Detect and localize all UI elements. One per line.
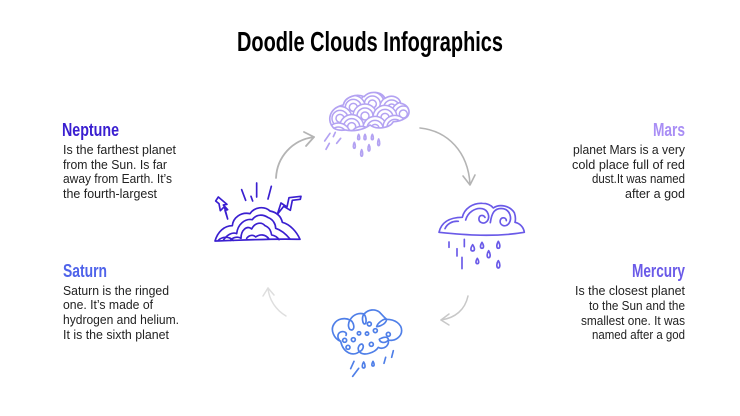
text block: Neptune: Is the farthest planet — [63, 142, 176, 157]
text block: Neptune — [62, 119, 176, 201]
text block: Neptune: from the Sun. Is far — [63, 157, 168, 172]
text block: Saturn: one. It’s made of — [63, 297, 153, 312]
icon: swirl rain cloud — [439, 203, 524, 269]
text block: Mercury: to the Sun and the — [589, 298, 685, 313]
text block: Saturn: Saturn is the ringed — [63, 283, 169, 298]
arrow: top cloud to right cloud — [420, 128, 475, 185]
text block: Mars: after a god — [625, 186, 685, 201]
text block: Saturn: hydrogen and helium. — [63, 312, 179, 327]
text block: Mercury: named after a god — [592, 327, 685, 342]
text block: Mercury: Mercury — [632, 260, 686, 281]
text block: Mercury: Is the closest planet — [575, 283, 685, 298]
text block: Neptune: the fourth-largest — [63, 186, 157, 201]
text block: Mars: dust.It was named — [592, 171, 685, 186]
title: Doodle Clouds Infographics — [237, 26, 503, 57]
text block: Mars — [572, 119, 685, 201]
text block: Saturn — [63, 260, 179, 342]
text block: Neptune: Neptune — [62, 119, 119, 140]
text block: Mars: planet Mars is a very — [573, 142, 685, 157]
icon: loopy rain cloud — [332, 310, 402, 376]
text block: Mercury: smallest one. It was — [581, 313, 685, 328]
text block: Saturn: It is the sixth planet — [63, 327, 169, 342]
text block: Mercury — [575, 260, 686, 342]
icon: lightning storm cloud — [215, 183, 301, 241]
icon: scalloped rain cloud — [325, 92, 415, 156]
text block: Neptune: away from Earth. It’s — [63, 171, 172, 186]
arrow: left cloud to top cloud — [276, 132, 314, 178]
arrow: bottom cloud to left cloud — [263, 288, 286, 316]
text block: Mars: cold place full of red — [572, 157, 685, 172]
arrow: right cloud to bottom cloud — [441, 296, 468, 325]
text block: Saturn: Saturn — [63, 260, 107, 281]
text block: Mars: Mars — [653, 119, 685, 140]
